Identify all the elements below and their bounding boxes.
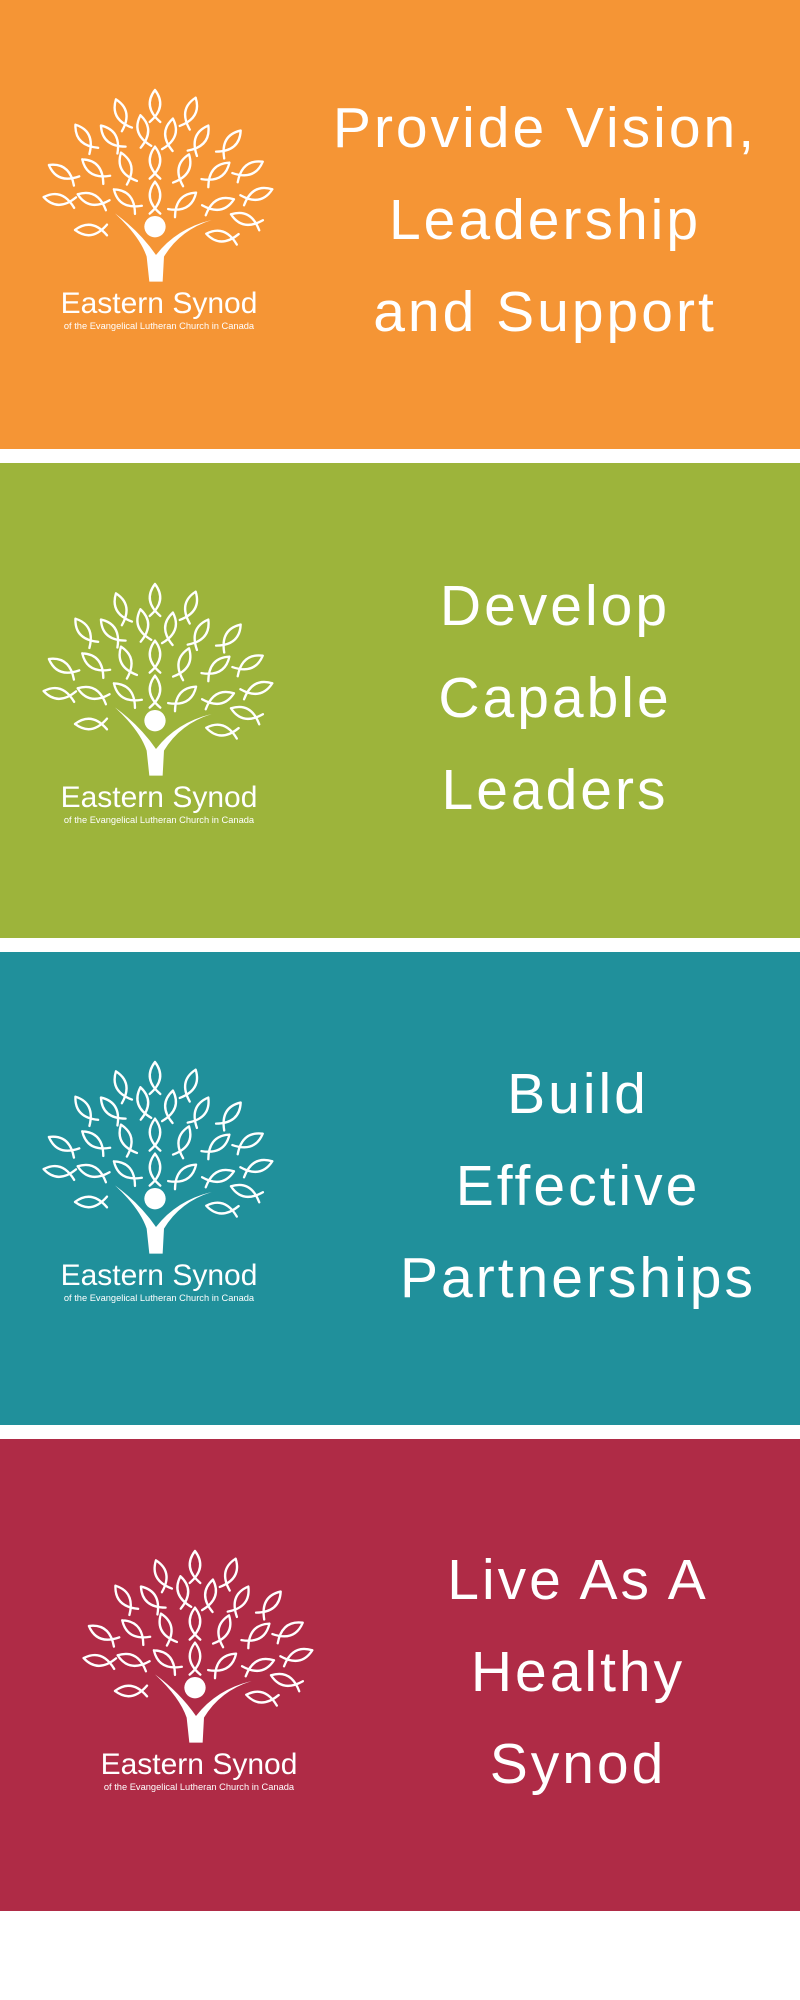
title (438, 574, 672, 822)
panel: provide vision (0, 0, 800, 449)
title (333, 96, 757, 344)
panel: live as a healthy synod (0, 1439, 800, 1911)
title: Healthy (471, 1640, 685, 1704)
title: Capable (438, 666, 672, 730)
title: Leaders (442, 758, 668, 822)
panel: build effective partnerships (0, 952, 800, 1425)
title: Develop (440, 574, 670, 638)
logo: eastern synod: of the Evangelical Lutheran Church in Canada (104, 1782, 295, 1792)
title: and Support (373, 280, 717, 344)
logo: eastern synod: Eastern Synod (61, 287, 257, 320)
title: Leadership (389, 188, 701, 252)
panel: develop capable leaders (0, 463, 800, 938)
title: Synod (490, 1732, 666, 1796)
title: Live As A (447, 1548, 709, 1612)
logo: eastern synod (42, 88, 274, 331)
logo: eastern synod (42, 1060, 274, 1303)
logo: eastern synod: Eastern Synod (61, 781, 257, 814)
title: Partnerships (400, 1246, 756, 1310)
logo: eastern synod (82, 1550, 314, 1792)
title: Effective (456, 1154, 700, 1218)
title (400, 1062, 756, 1310)
logo: eastern synod: of the Evangelical Lutheran Church in Canada (64, 321, 255, 331)
logo: eastern synod: of the Evangelical Lutheran Church in Canada (64, 1293, 255, 1303)
logo: eastern synod (42, 582, 274, 825)
title (447, 1548, 709, 1796)
title: Provide Vision, (333, 96, 757, 160)
logo: eastern synod: of the Evangelical Lutheran Church in Canada (64, 815, 255, 825)
logo: eastern synod: Eastern Synod (61, 1259, 257, 1292)
logo: eastern synod: Eastern Synod (101, 1748, 297, 1781)
title: Build (507, 1062, 649, 1126)
